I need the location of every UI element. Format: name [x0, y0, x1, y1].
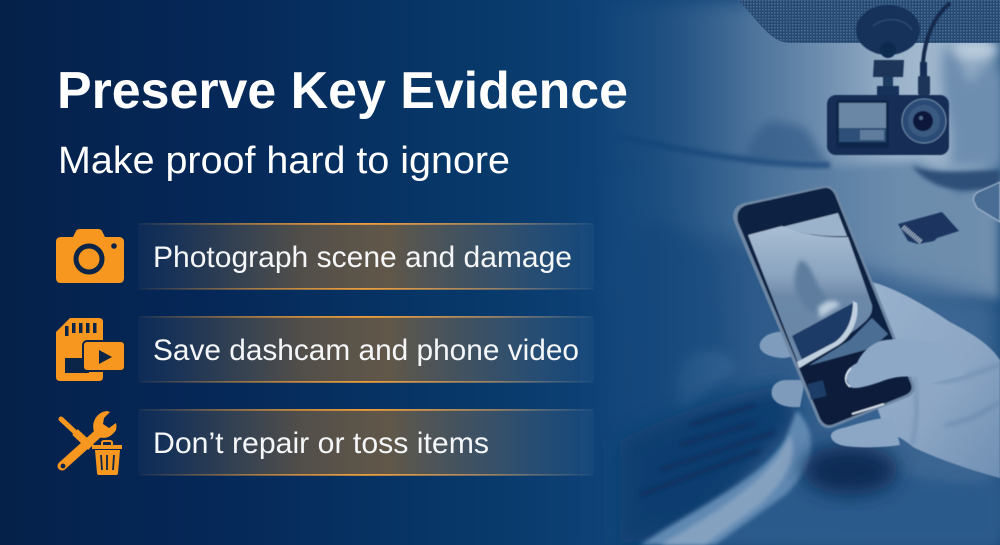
suction cup [856, 5, 920, 55]
row 2: save video [56, 316, 594, 383]
title: Preserve Key Evidence [57, 62, 628, 120]
screen [836, 100, 889, 148]
photo: smartphone [733, 186, 915, 428]
ground lower right [700, 440, 1000, 545]
car body lower area [600, 233, 1000, 545]
power cable [923, 3, 950, 62]
phone: dent [795, 260, 826, 313]
lens [902, 99, 946, 143]
icon: tools and trash [61, 411, 122, 475]
back fingers [760, 330, 800, 358]
phone: road texture [805, 318, 888, 368]
text: row 2: Save dashcam and phone video [153, 334, 579, 367]
row 3: don't repair or toss [61, 409, 594, 476]
icon: camera [56, 229, 124, 283]
panel: row 3 [138, 409, 594, 476]
shadow beneath hand [802, 445, 898, 495]
dashboard top [600, 158, 1000, 300]
phone: swipe bar [852, 404, 884, 414]
palm [850, 282, 1000, 478]
trash can [92, 445, 122, 449]
phone: grille [792, 303, 853, 362]
photo: thumb over phone [846, 339, 965, 388]
dash dark edge [615, 136, 830, 165]
fade to navy [580, 0, 900, 545]
photo: blurred car interior and bumper [580, 0, 1000, 545]
panel: row 2 [138, 316, 594, 383]
windshield frit band [738, 0, 1000, 43]
wrench [62, 431, 101, 466]
photo: second phone corner [974, 182, 1000, 222]
windshield view [600, 0, 1000, 180]
text: row 3: Don’t repair or toss items [153, 427, 489, 460]
camera body [827, 95, 949, 155]
phone frame [733, 186, 915, 428]
screwdriver [61, 419, 76, 433]
photo: hand behind phone [760, 282, 1000, 478]
grille stripes [640, 405, 775, 495]
photo: microSD card [898, 212, 959, 244]
bumper highlight [640, 410, 811, 545]
row 1: photograph [56, 223, 594, 290]
text: row 1: Photograph scene and damage [153, 241, 572, 274]
dark blurred object on dash [912, 166, 1000, 190]
icon: memory card and video [56, 318, 125, 381]
panel: row 1 [138, 223, 594, 290]
blurred trees [745, 40, 1000, 165]
phone: shutter area [800, 348, 911, 425]
subtitle: Make proof hard to ignore [58, 140, 510, 182]
grille shadow [620, 385, 800, 545]
ball mount [880, 42, 896, 58]
photo: dashcam [827, 3, 950, 155]
phone camera view: upper strip [782, 213, 847, 236]
phone camera view: car panel [748, 226, 872, 368]
